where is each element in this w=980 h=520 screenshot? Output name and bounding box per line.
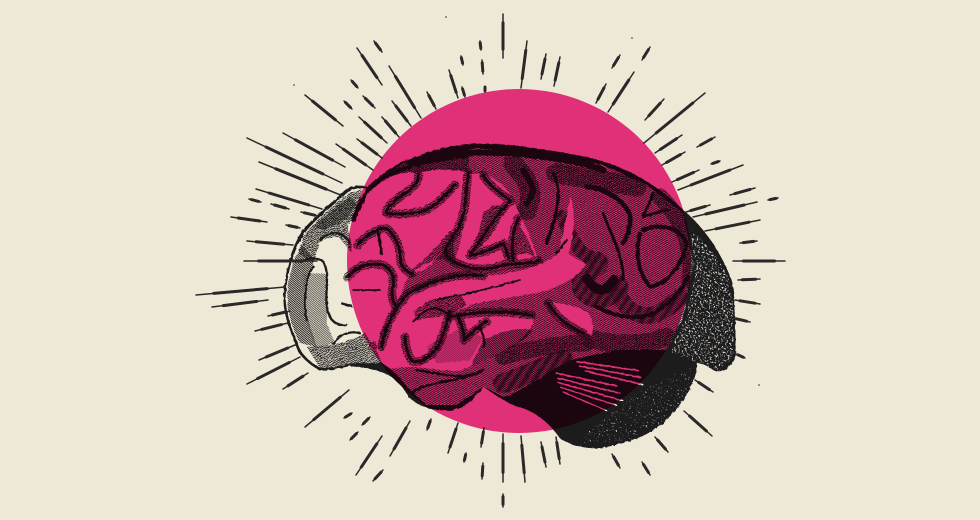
lower right light patch <box>548 303 593 335</box>
frontal mass <box>347 170 469 343</box>
brain engraving <box>283 143 736 448</box>
left lobe top dark patch <box>313 197 357 230</box>
left lobe outer band hatching <box>287 245 317 347</box>
cortex fine marks <box>353 233 567 397</box>
left lobe top hatching <box>298 189 362 263</box>
rays thick centres <box>196 14 785 507</box>
left lobe base <box>286 188 383 368</box>
cortex top outline <box>353 155 470 220</box>
cerebellum <box>503 350 697 448</box>
far right dark lobe speckle <box>670 230 734 370</box>
brain silhouette <box>283 143 736 448</box>
left lobe bottom hatching <box>307 330 385 368</box>
small specks <box>293 16 760 386</box>
light cortex masses <box>347 170 593 371</box>
pink circle multiplied over the brain <box>347 89 691 433</box>
hatched cortex midtone <box>353 148 693 405</box>
cerebellum dark mass <box>503 350 697 448</box>
cortex sulci lines <box>347 173 583 362</box>
cerebellum ribs <box>557 362 643 411</box>
left lobe mid hatching <box>303 273 335 348</box>
central top mass <box>454 174 538 273</box>
left lobe fold lines <box>300 233 360 343</box>
cerebellum speckle <box>580 367 692 445</box>
rays thin tips <box>196 14 785 507</box>
temporal mass <box>377 310 533 371</box>
long central band <box>382 196 586 347</box>
left lobe <box>286 188 385 368</box>
sunburst rays <box>196 14 785 507</box>
cortex shaded hatching <box>347 150 583 367</box>
right cortex fold shadows <box>410 153 691 383</box>
